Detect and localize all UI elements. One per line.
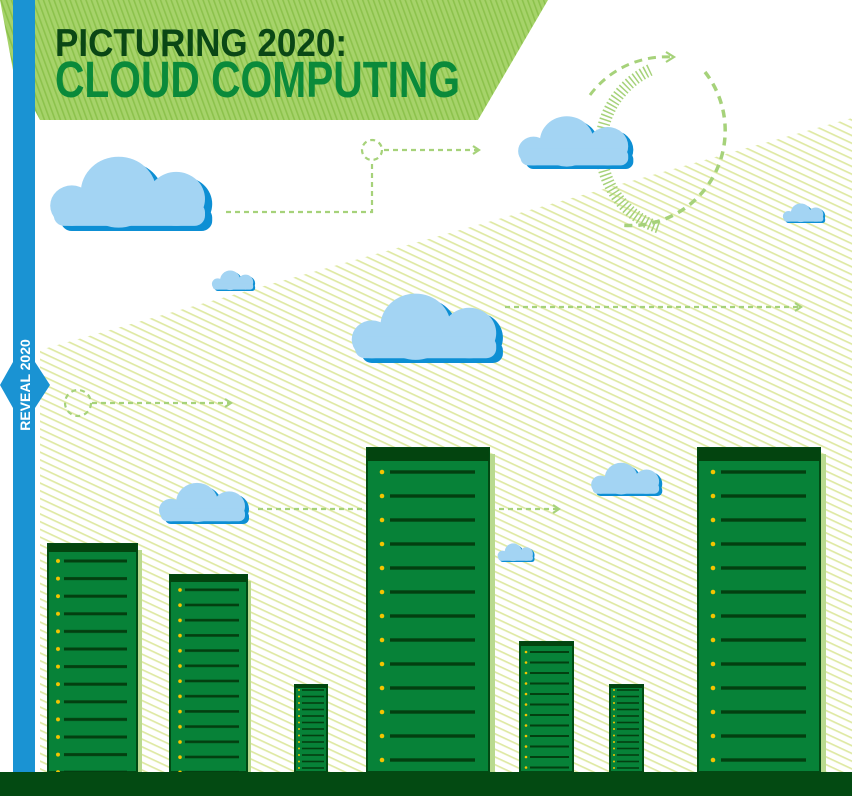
label: reveal 2020: REVEAL 2020 [17, 339, 33, 431]
hatched background [40, 118, 852, 772]
title line 2: CLOUD COMPUTING [55, 51, 460, 108]
ground bar [0, 772, 852, 796]
arrowheads [225, 52, 801, 513]
title banner [0, 0, 548, 120]
servers [48, 448, 826, 772]
blue vertical bar with label [0, 0, 50, 772]
dashed connector lines [65, 57, 800, 509]
tick arc [601, 70, 660, 228]
clouds [50, 116, 825, 562]
title line 1: PICTURING 2020: [55, 22, 347, 65]
